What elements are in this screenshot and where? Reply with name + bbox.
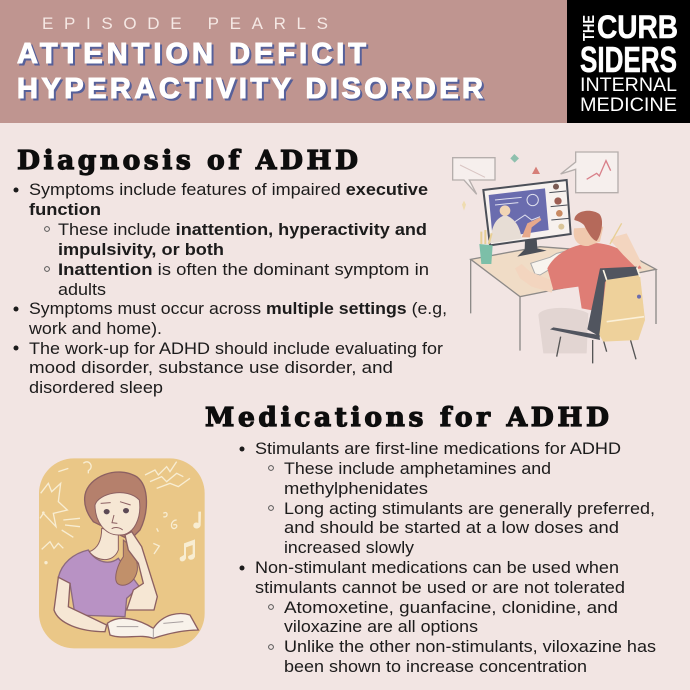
title: HYPERACTIVITY DISORDER (19, 75, 485, 107)
text block: diagnosis bullets: Inattention is often the dominant symptom in (58, 261, 429, 279)
text block: medication bullets: Stimulants are first-line medications for ADHD (255, 440, 621, 458)
notebook (531, 251, 568, 275)
title (17, 38, 485, 107)
logo: The Curb Siders Internal Medicine (567, 0, 690, 123)
text block: medication bullets: Unlike the other non-stimulants, viloxazine has (284, 638, 656, 656)
pen cup (479, 244, 493, 264)
text block: diagnosis bullets: Symptoms must occur across multiple settings (e.g, (29, 300, 447, 318)
text block: diagnosis bullets: The work-up for ADHD should include evaluating for (29, 340, 444, 358)
text block: medication bullets: increased slowly (284, 539, 415, 557)
text block: medication bullets: been shown to increase concentration (284, 658, 587, 676)
book (107, 614, 198, 638)
icon: right speech bubble chart (561, 152, 618, 193)
text block: diagnosis bullets: impulsivity, or both (58, 241, 224, 259)
yellow rounded panel (39, 458, 205, 648)
episode label: EPISODE PEARLS (42, 14, 328, 33)
shirt (58, 550, 139, 617)
person (515, 264, 555, 293)
hair lock (116, 540, 137, 585)
person legs (538, 308, 588, 353)
text block: diagnosis bullets: work and home). (28, 320, 162, 338)
title: HYPERACTIVITY DISORDER (17, 73, 483, 105)
chair and backpack (587, 267, 640, 337)
title: ATTENTION DEFICIT (19, 40, 368, 72)
text block: diagnosis bullets: mood disorder, substance use disorder, and (29, 359, 393, 377)
text block: medication bullets: Long acting stimulants are generally preferred, (284, 500, 655, 518)
heading: Medications for ADHD: Medications for ADHD (205, 402, 609, 433)
text block: diagnosis bullets: function (29, 201, 101, 219)
text block: diagnosis bullets: disordered sleep (29, 379, 163, 397)
text block: medication bullets: stimulants cannot be used or are not tolerated (255, 579, 625, 597)
logo: The Curb Siders Internal Medicine: MEDICINE (580, 95, 677, 116)
illustration: distracted woman reading a book (39, 458, 205, 648)
confetti (510, 154, 519, 163)
text block: medication bullets: Atomoxetine, guanfacine, clonidine, and (284, 599, 618, 617)
icon: left speech bubble (453, 158, 495, 194)
text block: medication bullets: methylphenidates (284, 480, 428, 498)
face (95, 493, 140, 535)
text block: diagnosis bullets: Symptoms include features of impaired executive (29, 181, 428, 199)
monitor (483, 180, 571, 245)
monitor stand (517, 239, 547, 257)
text block: diagnosis bullets: These include inattention, hyperactivity and (58, 221, 427, 239)
distraction doodles (40, 462, 190, 554)
desk (471, 247, 656, 297)
hair back (85, 472, 146, 540)
raised arm (125, 532, 157, 610)
logo: The Curb Siders Internal Medicine: CURB (597, 9, 678, 45)
text block: diagnosis bullets: adults (58, 281, 106, 299)
heading: Diagnosis of ADHD: Diagnosis of ADHD (17, 145, 358, 176)
illustration: man on video call at desk (453, 152, 656, 363)
text block: medication bullets (240, 440, 656, 676)
logo: The Curb Siders Internal Medicine: THE (581, 15, 598, 41)
text block: medication bullets: Non-stimulant medications can be used when (255, 559, 619, 577)
header banner (0, 0, 567, 123)
text block: medication bullets: These include amphetamines and (284, 460, 551, 478)
text block: medication bullets: and should be started at a low doses and (284, 519, 619, 537)
text block: medication bullets: viloxazine are all options (284, 618, 478, 636)
arms and neck (54, 577, 107, 632)
text block: diagnosis bullets (14, 181, 447, 397)
logo: The Curb Siders Internal Medicine: INTERNAL (580, 75, 677, 96)
title: ATTENTION DEFICIT (17, 38, 366, 70)
